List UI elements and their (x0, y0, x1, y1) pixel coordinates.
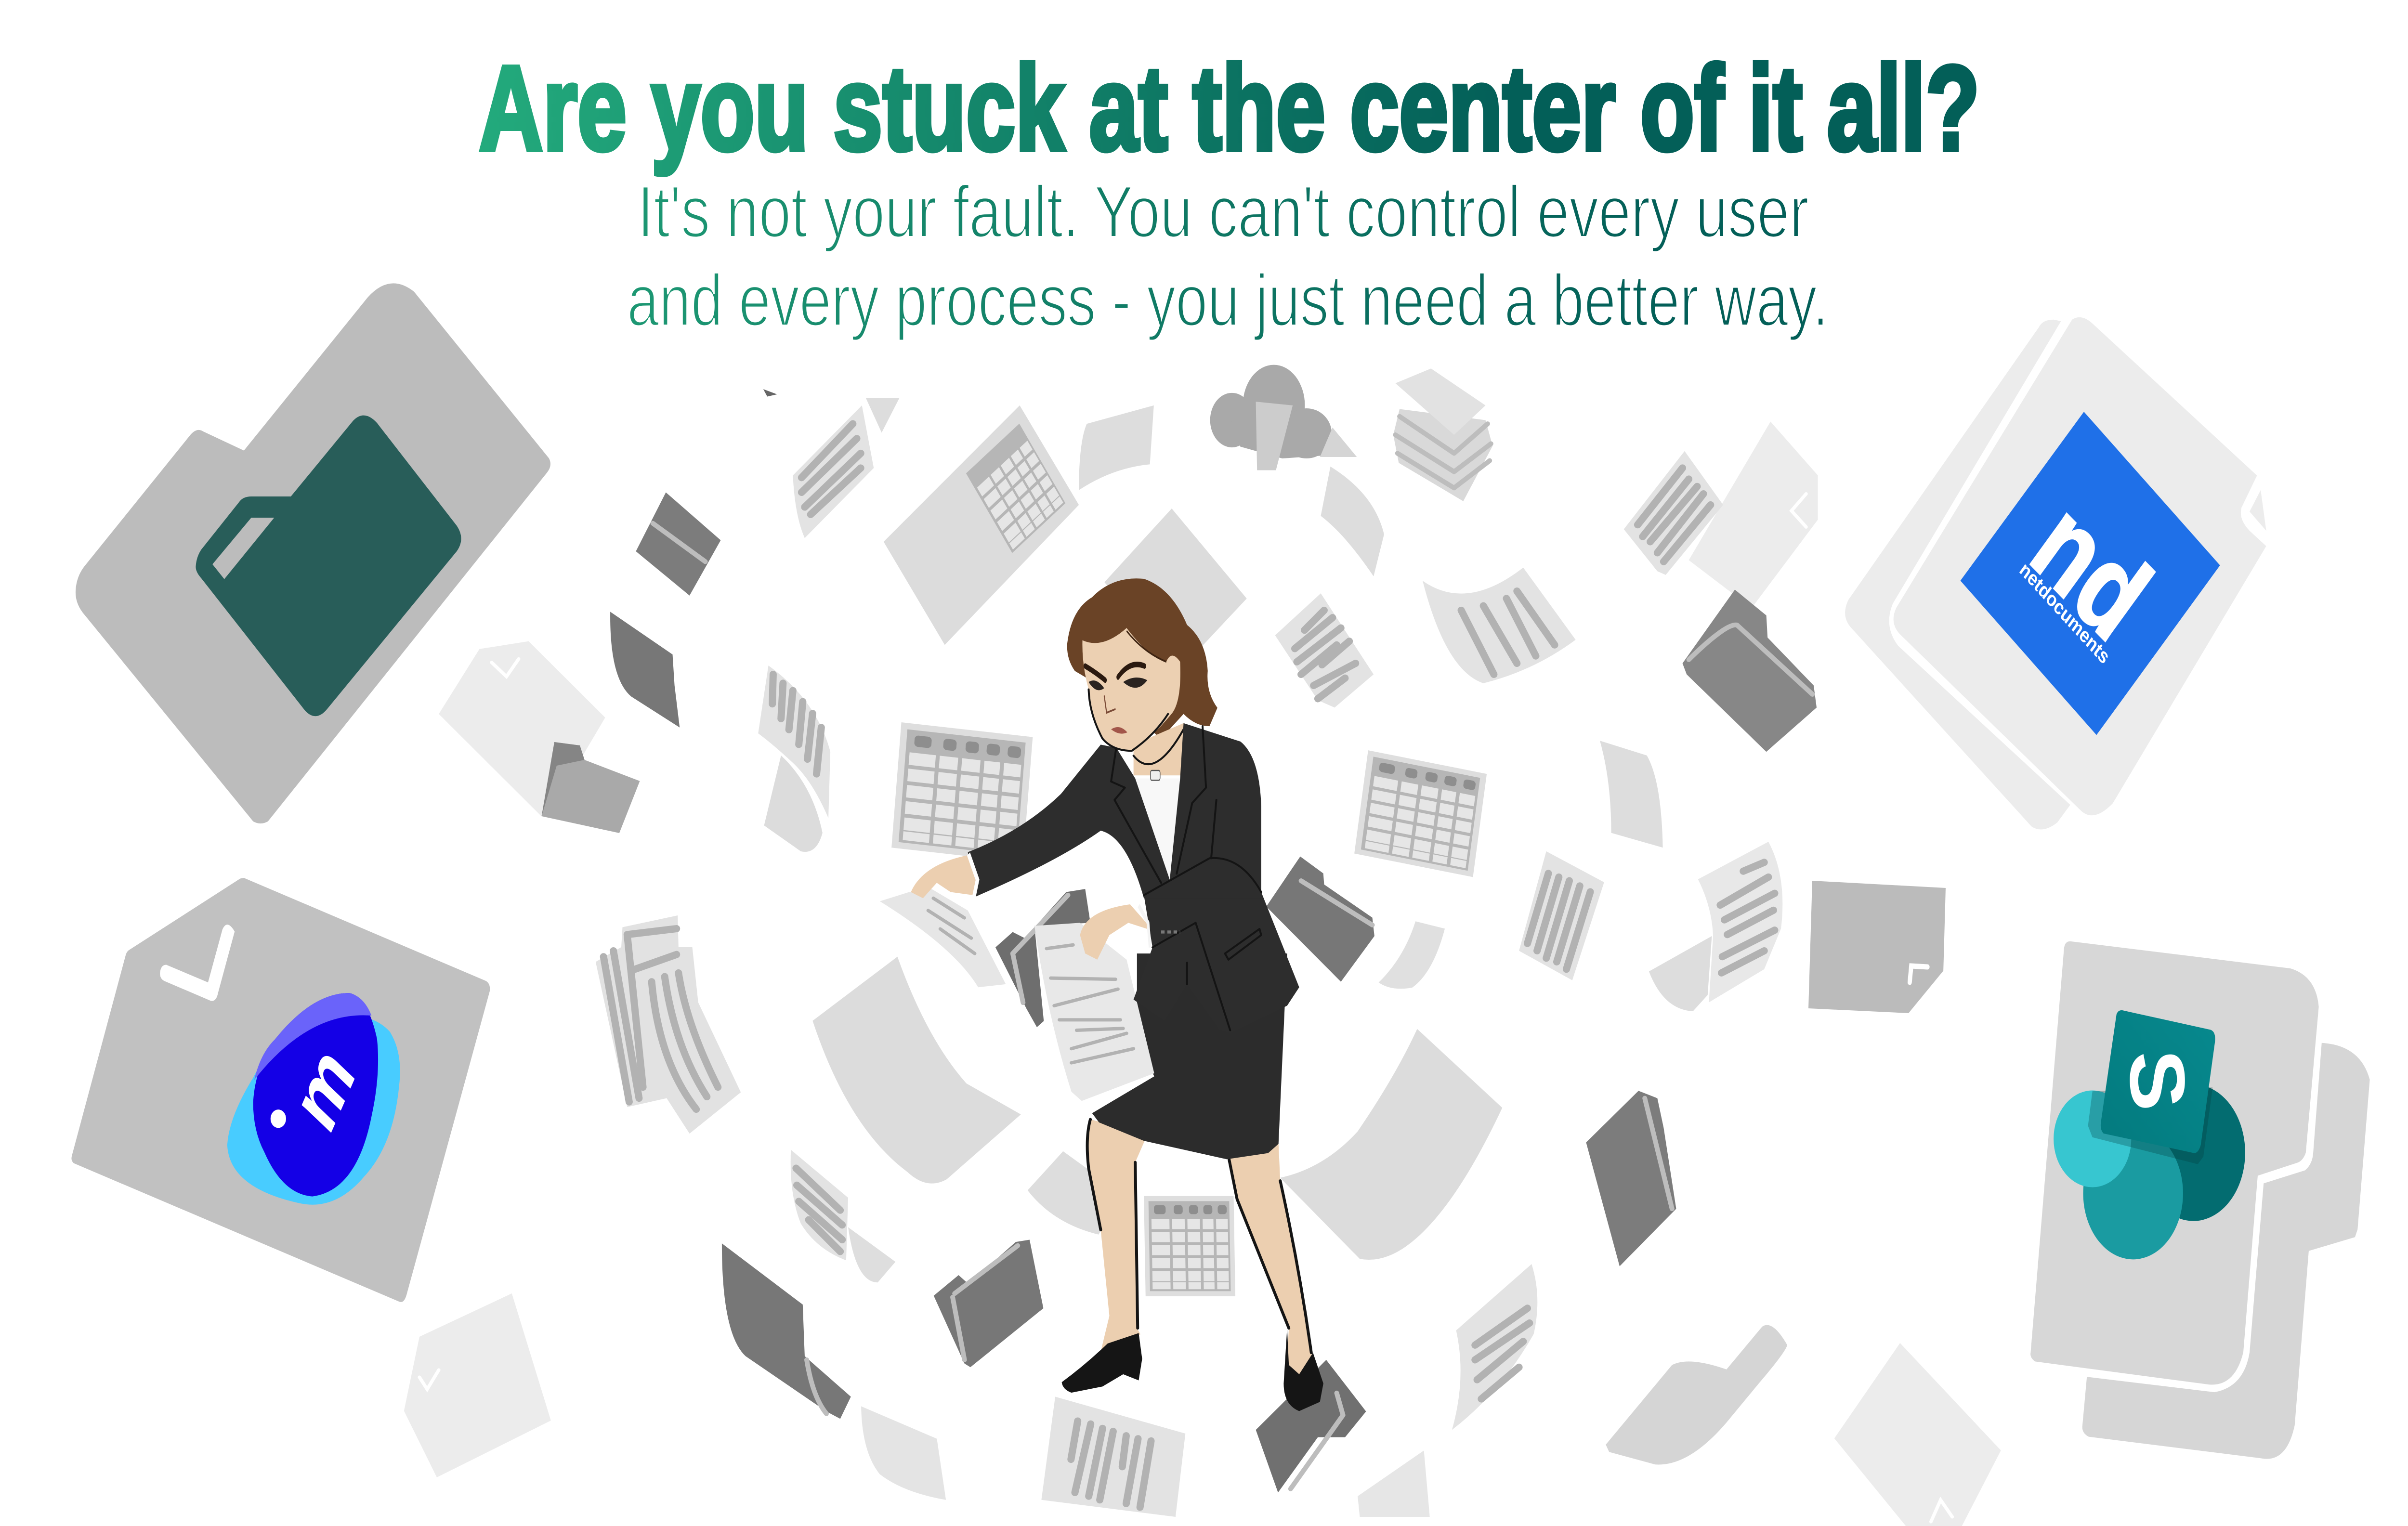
icon: large folder (76, 283, 550, 823)
icon: NetDocuments file (1845, 317, 2266, 829)
neck and shirt (1134, 723, 1185, 880)
left side file icons (71, 283, 605, 1302)
icon: pale document (439, 641, 605, 816)
pale document bottom right (1834, 1343, 2001, 1526)
paper in left hand (880, 889, 1006, 987)
large blank page left (812, 957, 1021, 1184)
spreadsheet by the knee (1144, 1196, 1235, 1296)
curved text page (793, 405, 874, 538)
right side logo files (1845, 317, 2370, 1459)
icon: SharePoint file: S (2112, 1046, 2201, 1114)
icon: SharePoint file (2030, 941, 2370, 1459)
curved blank page (1600, 741, 1663, 848)
blank page behind head (1104, 509, 1247, 674)
pale wavy folder (1606, 1325, 1787, 1465)
subtitle (627, 171, 1829, 341)
paper in right hand (1034, 923, 1154, 1101)
wide curved text page (1423, 568, 1576, 683)
spreadsheet (1354, 750, 1487, 877)
cloud icon (1210, 365, 1357, 470)
dark folder beside jacket (1266, 857, 1374, 982)
spreadsheet (891, 722, 1033, 862)
icon: NetDocuments file: netdocuments (2016, 558, 2114, 668)
icon: NetDocuments file: nd (2011, 474, 2172, 665)
icon: grey folder over pale document (542, 742, 640, 833)
dark folder behind paper (995, 889, 1090, 1027)
page corner (866, 398, 899, 432)
dark curved folder (610, 612, 680, 728)
dark open folder (934, 1239, 1043, 1367)
curled text page lower (791, 1150, 895, 1282)
hair (1067, 578, 1217, 739)
subtitle: and every process - you just need a better way. (627, 260, 1829, 341)
legs (1087, 1119, 1320, 1390)
large blank page right (1280, 1029, 1502, 1260)
skirt (1092, 953, 1287, 1159)
curved blank page (1321, 467, 1384, 576)
small curved page (1379, 921, 1445, 989)
stacked documents (596, 915, 741, 1134)
woman in suit (880, 578, 1323, 1411)
dark portrait folder (1586, 1091, 1676, 1266)
sliver of folder (763, 389, 777, 396)
swirling papers left (596, 389, 1185, 1517)
grey document right (1808, 881, 1946, 1013)
grey folder top right (1683, 589, 1817, 752)
tilted text page (1275, 593, 1374, 707)
folded text page right (1649, 842, 1782, 1011)
dark flat folder (636, 492, 720, 596)
curling text page (758, 665, 830, 852)
dark folder under foot (1256, 1360, 1366, 1492)
textured page bottom (861, 1406, 946, 1500)
spreadsheet behind legs and woman figure (880, 578, 1323, 1411)
icon: pale document bottom left (404, 1293, 551, 1477)
text page top right (1624, 451, 1723, 575)
isometric page with grid (884, 405, 1079, 645)
pale hexagon page (1689, 422, 1818, 608)
title: Are you stuck at the center of it all? (479, 41, 1980, 176)
dark curled folder (722, 1243, 851, 1419)
face (1082, 628, 1180, 751)
hands (911, 854, 1150, 960)
text page center right (1519, 851, 1604, 980)
subtitle: It's not your fault. You can't control every user (638, 171, 1809, 253)
necklace (1134, 730, 1184, 780)
icon: document with Mimecast style logo: m (279, 1027, 368, 1149)
jacket (968, 723, 1299, 1033)
icon: document with Mimecast style logo (71, 878, 490, 1302)
stack of papers (1393, 368, 1492, 501)
shoes (1062, 1328, 1323, 1411)
swirling papers right (1210, 365, 1818, 1517)
bottom page (1358, 1450, 1430, 1517)
lower text page (1452, 1264, 1537, 1430)
page behind knee (1028, 1151, 1122, 1235)
small curved blank page (1079, 405, 1154, 490)
bottom text page (1041, 1396, 1185, 1517)
